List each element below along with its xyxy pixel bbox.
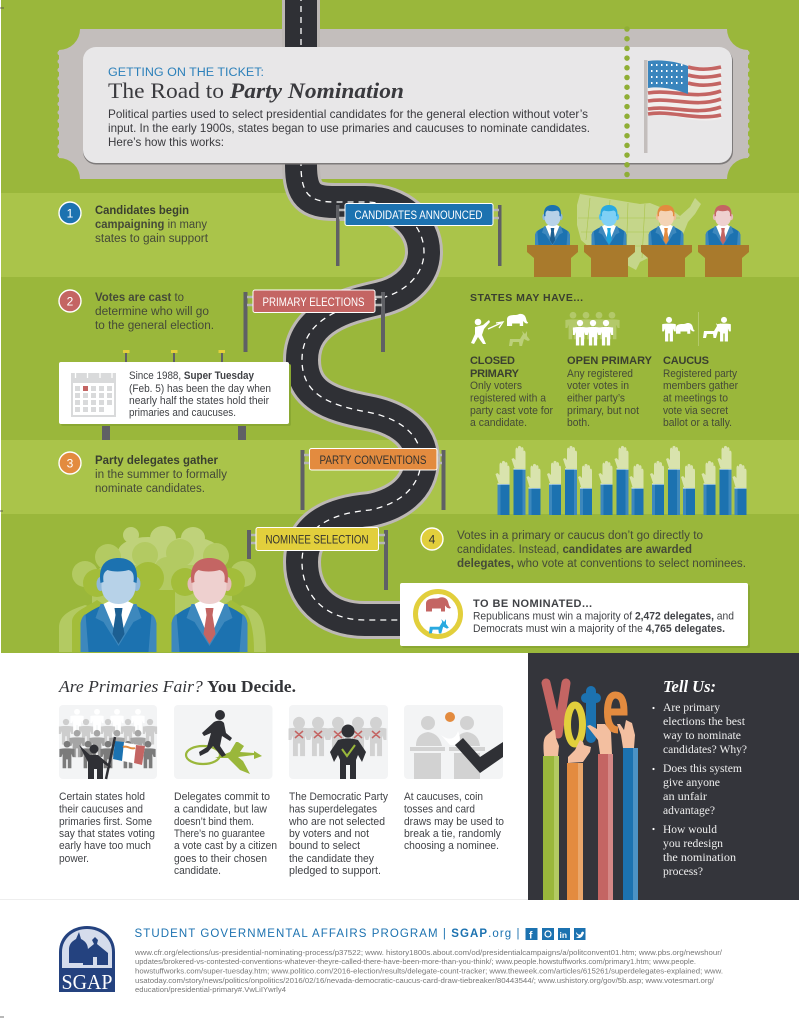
- source list: usatoday.com/story/news/politics/onpolitics/2016/02/16/nevada-democratic-caucus-card-draw-tiebreaker/80443544/; www.ushistory.org/gov/5b.asp; www.votesmart.org/: [135, 976, 715, 985]
- map of the United States: [577, 194, 701, 270]
- number badge 1: 1: [67, 206, 74, 220]
- step 2 text: [95, 292, 214, 332]
- letter o: [568, 705, 582, 744]
- step 4 text: [457, 530, 746, 570]
- letter e: [608, 695, 624, 730]
- source list: howstuffworks.com/super-tuesday.htm; www.politico.com/2016-election/results/delegate-count-tracker; www.theweek.com/articles/615261/superdelegates-explained; www.: [135, 966, 723, 976]
- closed primary text: PRIMARY: [470, 368, 520, 380]
- eyebrow heading: GETTING ON THE TICKET:: [108, 67, 264, 79]
- step 3: [59, 452, 227, 495]
- step 3 text: nominate candidates.: [95, 483, 205, 495]
- sign: party conventions: [300, 448, 446, 510]
- candidate 2: [592, 205, 626, 248]
- nominated text: TO BE NOMINATED...: [473, 598, 592, 610]
- sign: primary elections: [244, 290, 385, 352]
- text: delegates commit: a vote cast by a citizen: [174, 840, 277, 852]
- text: superdelegates: who are not selected: [288, 816, 385, 828]
- states heading: STATES MAY HAVE...: [470, 292, 583, 304]
- candidate 4: [706, 205, 740, 248]
- candidate: blue: [80, 558, 156, 652]
- icon: caucus: [662, 312, 731, 346]
- source list: education/presidential-primary#.VwLiIYwrly4: [135, 985, 286, 994]
- closed primary text: [470, 355, 553, 429]
- text: states first: their caucuses and: [59, 804, 143, 816]
- text: coin tosses: At caucuses, coin: [404, 791, 483, 803]
- text: delegates commit: goes to their chosen: [174, 853, 267, 865]
- tell us questions: candidates? Why?: [663, 742, 747, 756]
- Super Tuesday text: (Feb. 5) has been the day when: [129, 383, 271, 395]
- closed primary text: a candidate.: [470, 417, 527, 429]
- intro text: Political parties used to select presidential candidates for the general election without voter’s: [108, 107, 588, 121]
- tell us questions: elections the best: [663, 714, 746, 728]
- intro text: Here’s how this works:: [108, 135, 224, 149]
- closed primary text: CLOSED: [470, 355, 515, 367]
- closed primary text: Only voters: [470, 380, 522, 392]
- caucus text: [663, 355, 738, 429]
- tell us questions: an unfair: [663, 789, 707, 803]
- closed primary text: registered with a: [470, 392, 547, 404]
- nominated text: Republicans must win a majority of 2,472 delegates, and: [473, 610, 734, 622]
- tell us questions: Are primary: [663, 700, 720, 714]
- step 2: [59, 290, 214, 332]
- icon card: walking delegate: [174, 705, 272, 779]
- source list: updates/brokered-vs-contested-conventions-whatever-theyre-called-there-have-been-more-than-you-think/; www.people.howstuffworks.com/primary1.htm; www.people.: [135, 957, 696, 966]
- candidate 1: [535, 205, 570, 248]
- step 1 text: [95, 205, 209, 245]
- text: delegates commit: a candidate, but law: [174, 804, 267, 816]
- number badge 2: [59, 290, 81, 312]
- crop marks: [0, 8, 4, 1017]
- section heading: Are Primaries Fair? You Decide.: [58, 677, 296, 696]
- text: superdelegates: by voters and not: [289, 828, 369, 840]
- sign: primary elections: PRIMARY ELECTIONS: [262, 297, 365, 309]
- SGAP logo: [59, 926, 115, 994]
- nominated text: [473, 598, 734, 635]
- sign: party conventions: PARTY CONVENTIONS: [320, 455, 427, 467]
- source list: www.cfr.org/elections/us-presidential-nominating-process/p37522; www. history1800s.about.com/od/presidentialcampaigns/a/politconvent01.htm; www.pbs.org/newshour/: [134, 948, 723, 957]
- open primary text: both.: [567, 417, 590, 429]
- open primary text: OPEN PRIMARY: [567, 355, 653, 367]
- text: coin tosses: choosing a nominee.: [404, 840, 499, 852]
- step 1 text: states to gain support: [95, 233, 209, 245]
- open primary text: Any registered: [567, 368, 633, 380]
- red arm: [587, 724, 613, 900]
- tell us heading: Tell Us:: [663, 677, 716, 696]
- tell us questions: Does this system: [663, 761, 743, 775]
- candidate: red: [172, 558, 248, 652]
- intro text: input. In the early 1900s, states began to use primaries and caucuses to nominate candidates.: [108, 121, 590, 135]
- step 1 text: campaigning in many: [95, 219, 207, 231]
- step 2 text: Votes are cast to: [95, 292, 184, 304]
- social icons: [526, 928, 586, 942]
- divider line: [0, 899, 528, 900]
- number badge 3: 3: [67, 456, 74, 470]
- SGAP logo: SGAP: [62, 970, 112, 994]
- states may have panel: [470, 292, 738, 429]
- letter V: [546, 683, 566, 734]
- vote letters and hands: [543, 683, 638, 900]
- text: superdelegates: bound to select: [289, 840, 360, 852]
- billboard: Super Tuesday: [59, 350, 291, 440]
- Super Tuesday text: nearly half the states hold their: [129, 395, 269, 407]
- text: states first: power.: [59, 853, 89, 865]
- step 4 text: delegates, who vote at conventions to select nominees.: [457, 558, 746, 570]
- text: coin tosses: draws may be used to: [404, 816, 504, 828]
- band: step 3: [1, 440, 799, 514]
- step 3 text: Party delegates gather: [95, 455, 219, 467]
- text: states first: primaries first. Some: [59, 816, 152, 828]
- icon: open primary: [565, 312, 620, 346]
- social icons: in: [560, 930, 567, 940]
- open primary text: primary, but not: [567, 405, 639, 417]
- number badge 2: 2: [67, 294, 74, 308]
- blue arm: [617, 720, 638, 900]
- step 3 text: [95, 455, 227, 495]
- open primary text: [567, 355, 653, 429]
- step 1: [59, 202, 209, 245]
- closed primary text: party cast vote for: [470, 405, 553, 417]
- letter t: [586, 691, 596, 738]
- band: step 1: [1, 193, 799, 277]
- Super Tuesday text: Since 1988, Super Tuesday: [129, 370, 255, 382]
- tell us questions: give anyone: [663, 775, 720, 789]
- text: superdelegates: the candidate they: [289, 853, 374, 865]
- sign: nominee selection: NOMINEE SELECTION: [266, 534, 368, 546]
- step 1 text: Candidates begin: [95, 205, 189, 217]
- text: coin tosses: break a tie, randomly: [404, 828, 501, 840]
- main title: The Road to Party Nomination: [108, 78, 404, 103]
- panel: tell us: [528, 653, 799, 900]
- caucus text: Registered party: [663, 368, 737, 380]
- number badge 1: [59, 202, 81, 224]
- text: delegates commit: There’s no guarantee: [174, 828, 265, 840]
- panel: are primaries fair: [58, 677, 504, 877]
- podiums: [527, 245, 749, 277]
- number badge 4: 4: [429, 532, 436, 546]
- caucus text: CAUCUS: [663, 355, 709, 367]
- step 2 text: determine who will go: [95, 306, 209, 318]
- nominated text: Democrats must win a majority of the 4,765 delegates.: [473, 623, 725, 635]
- candidate 3: [649, 205, 683, 248]
- text: superdelegates: [288, 791, 388, 877]
- open primary text: either party’s: [567, 392, 625, 404]
- text: delegates commit: Delegates commit to: [174, 791, 270, 803]
- text: delegates commit: [174, 791, 277, 877]
- tell us questions: you redesign: [663, 836, 723, 850]
- text: states first: [59, 791, 155, 865]
- icon card: coin toss: [404, 705, 503, 779]
- tell us questions: How would: [663, 822, 717, 836]
- icon: party ring: [416, 592, 460, 636]
- number badge 4: [421, 528, 443, 550]
- Super Tuesday text: primaries and caucuses.: [129, 407, 236, 419]
- icon card: superdelegates: [289, 705, 388, 779]
- crowd silhouettes: [59, 526, 266, 652]
- orange arm: [567, 740, 591, 900]
- text: superdelegates: has superdelegates: [289, 804, 377, 816]
- text: states first: early have too much: [59, 840, 151, 852]
- winding road: [301, 0, 430, 620]
- caucus text: members gather: [663, 380, 738, 392]
- tell us questions: way to nominate: [663, 728, 741, 742]
- step 4 text: candidates. Instead, candidates are awarded: [457, 544, 692, 556]
- number badge 3: [59, 452, 81, 474]
- icon: closed primary: [471, 314, 530, 346]
- green arm: [543, 730, 559, 900]
- icon: calendar: [71, 370, 116, 417]
- step 2 text: to the general election.: [95, 320, 214, 332]
- sign: candidates announced: CANDIDATES ANNOUNCED: [354, 210, 482, 222]
- caucus text: ballot or a tally.: [663, 417, 732, 429]
- tell us questions: advantage?: [663, 803, 715, 817]
- Super Tuesday text: [129, 370, 271, 419]
- raised delegate hands: [496, 446, 746, 515]
- text: delegates commit: candidate.: [174, 865, 221, 877]
- ticket card: [83, 29, 733, 179]
- tell us questions: process?: [663, 864, 703, 878]
- caucus text: at meetings to: [663, 392, 728, 404]
- card: to be nominated: [400, 583, 750, 648]
- step 3 text: in the summer to formally: [95, 469, 227, 481]
- ticket backing: [59, 29, 748, 179]
- green road section background: [1, 0, 799, 653]
- caucus text: vote via secret: [663, 405, 728, 417]
- text: coin tosses: tosses and card: [404, 804, 475, 816]
- text: superdelegates: The Democratic Party: [289, 791, 388, 803]
- step 4 text: Votes in a primary or caucus don’t go directly to: [457, 530, 703, 542]
- text: states first: say that states voting: [59, 828, 155, 840]
- icon: US flag: [644, 60, 721, 153]
- candidates at podiums: [527, 205, 749, 277]
- tell us questions: the nomination: [663, 850, 736, 864]
- step 4: [421, 528, 746, 570]
- social icons: f: [529, 930, 533, 942]
- text: superdelegates: pledged to support.: [289, 865, 381, 877]
- icon card: early states crowd: [59, 705, 157, 779]
- text: states first: Certain states hold: [59, 791, 145, 803]
- intro text: [108, 107, 590, 149]
- text: coin tosses: [404, 791, 504, 852]
- sign: candidates announced: [336, 204, 502, 266]
- sign: nominee selection: [247, 528, 388, 590]
- open primary text: voter votes in: [567, 380, 629, 392]
- text: delegates commit: doesn’t bind them.: [174, 816, 254, 828]
- source list: [134, 948, 723, 994]
- tell us questions: [652, 700, 747, 878]
- footer heading: STUDENT GOVERNMENTAL AFFAIRS PROGRAM | SGAP.org |: [134, 928, 520, 940]
